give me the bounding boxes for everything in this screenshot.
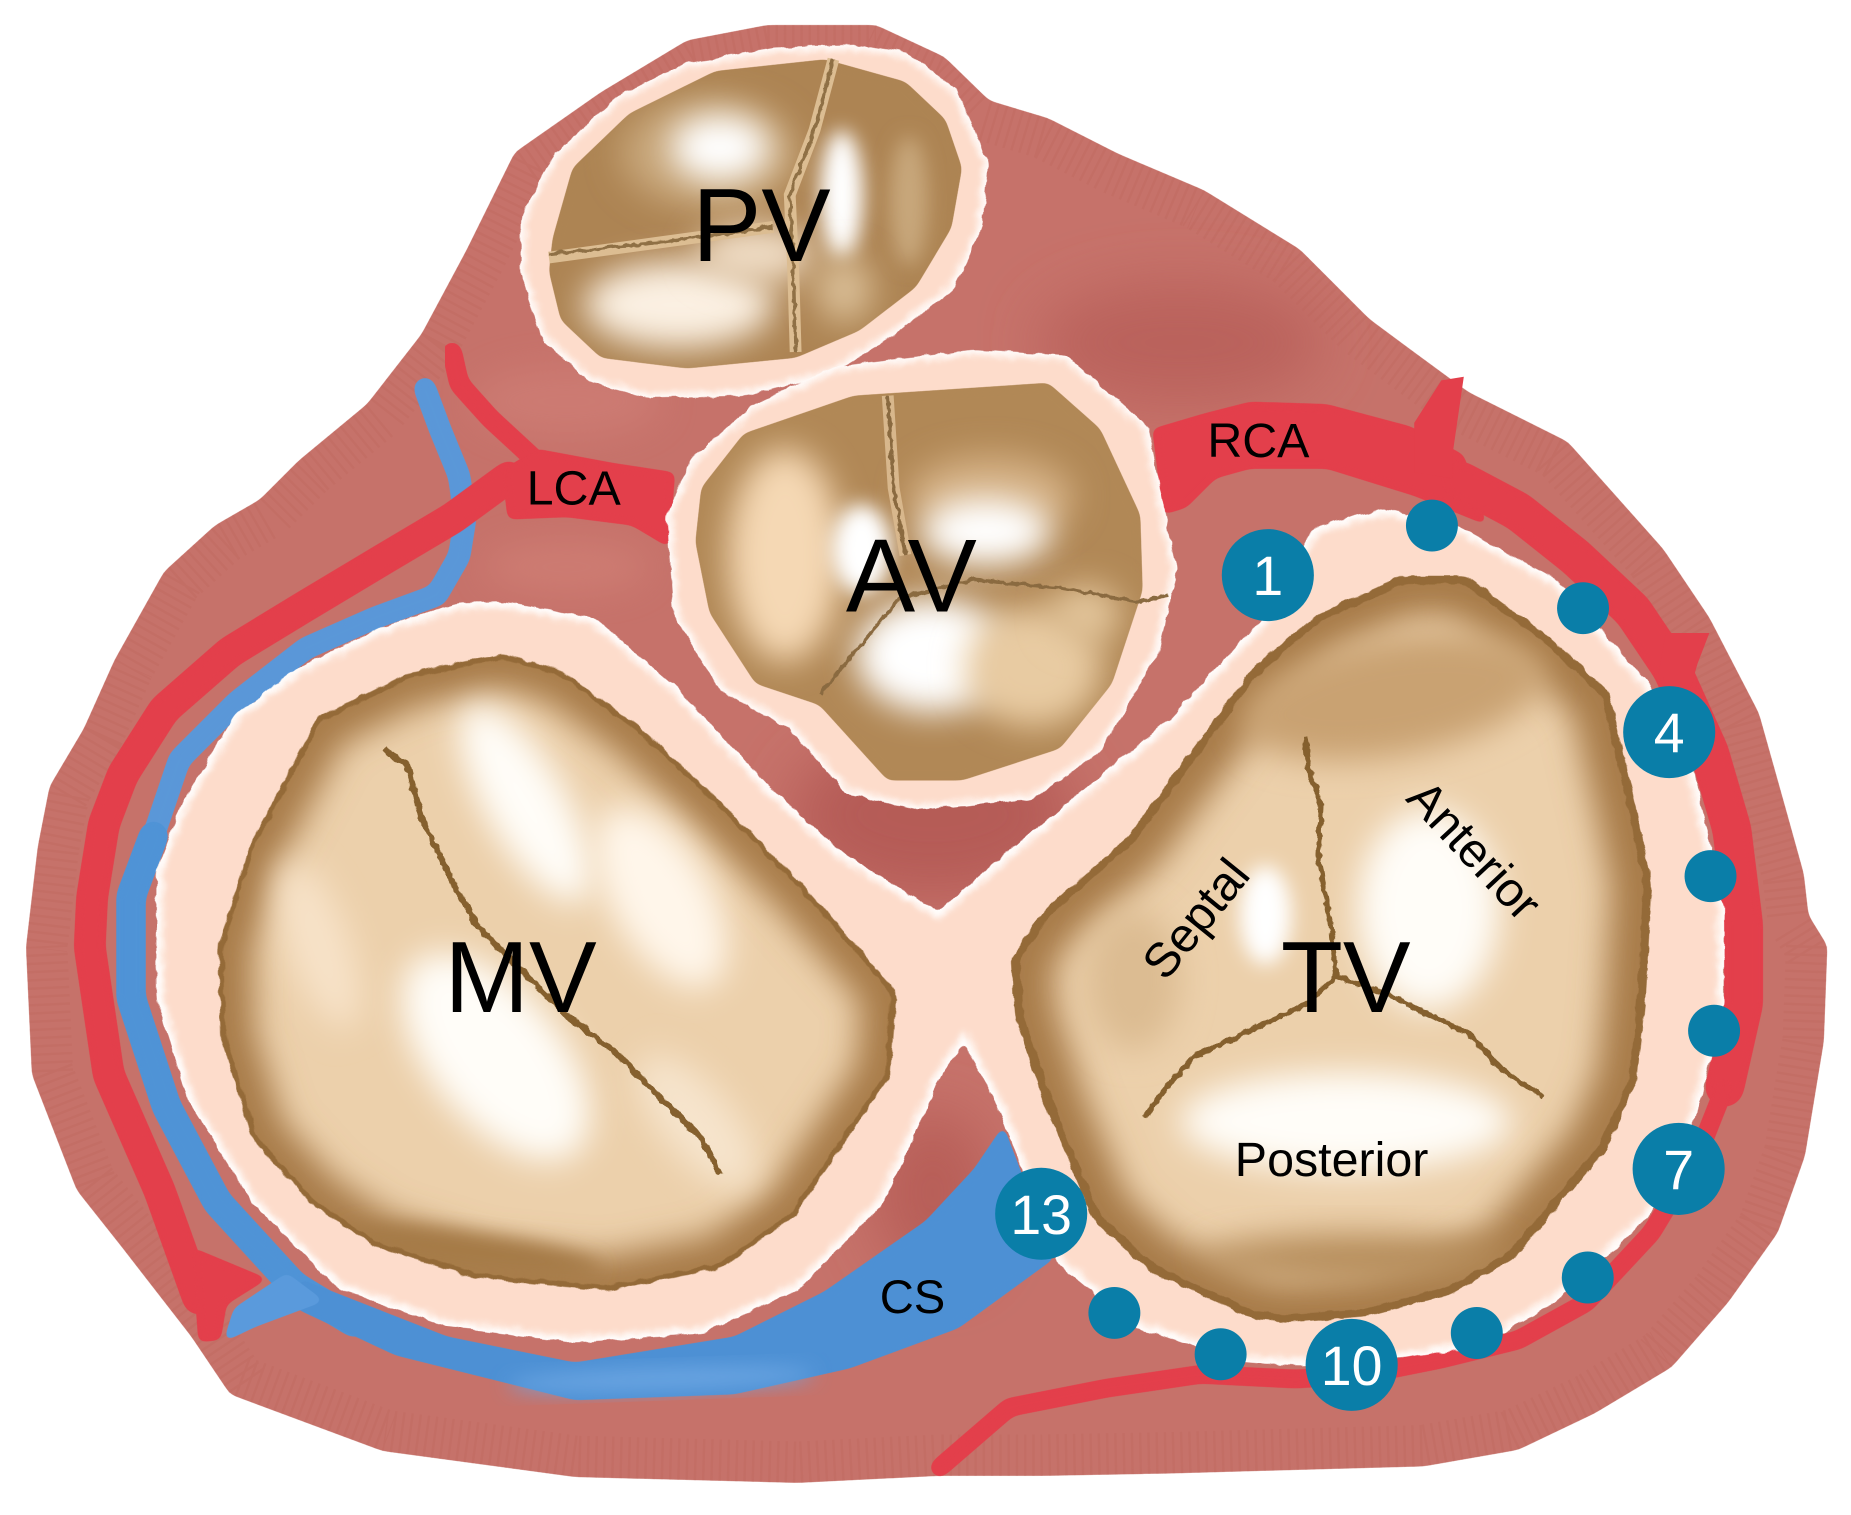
aortic valve (669, 352, 1175, 808)
pulmonary valve cusp lines (549, 59, 833, 352)
marker 13 (995, 1168, 1087, 1260)
mitral valve (221, 657, 894, 1288)
pulmonary valve (523, 47, 986, 396)
marker 1: 1 (1252, 545, 1283, 607)
aortic valve cusp lines (888, 396, 905, 555)
marker 7: 7 (1663, 1139, 1694, 1201)
leaflet label: Septal: Septal (1132, 849, 1260, 989)
label: CS: CS (880, 1271, 945, 1324)
coronary sinus (blue vein) (131, 389, 1054, 1400)
marker 4 (1623, 686, 1715, 778)
small marker 6 (1688, 1005, 1740, 1057)
marker 1 (1222, 529, 1314, 621)
annulus cream frame of mitral and tricuspid valves (159, 511, 1721, 1362)
label: LCA: LCA (527, 461, 621, 515)
numbered annulus markers (995, 500, 1740, 1411)
valve label: TV: TV (1281, 920, 1411, 1034)
marker 10 (1306, 1319, 1398, 1411)
label: RCA: RCA (1207, 414, 1310, 468)
valve label: PV: PV (692, 168, 831, 284)
small marker 11 (1195, 1328, 1247, 1380)
marker 10: 10 (1321, 1335, 1383, 1397)
valve label: MV: MV (444, 920, 597, 1034)
small marker 9 (1451, 1307, 1503, 1359)
small marker 8 (1562, 1252, 1614, 1303)
small marker 12 (1088, 1287, 1140, 1339)
small marker 3 (1557, 582, 1609, 634)
left coronary artery (90, 352, 675, 1342)
tricuspid valve closure lines (1145, 736, 1543, 1117)
marker 7 (1633, 1123, 1725, 1215)
marker 4: 4 (1654, 702, 1685, 764)
mitral valve closure line (384, 750, 720, 1175)
leaflet label: Anterior: Anterior (1397, 770, 1552, 931)
small marker 5 (1685, 850, 1736, 902)
tricuspid valve (1015, 580, 1648, 1319)
valve label: AV: AV (846, 519, 977, 635)
right coronary artery (940, 377, 1744, 1468)
coronary sinus branch (223, 1273, 325, 1342)
marker 13: 13 (1010, 1184, 1072, 1246)
leaflet label: Posterior: Posterior (1235, 1133, 1428, 1187)
small marker 2 (1406, 500, 1458, 552)
